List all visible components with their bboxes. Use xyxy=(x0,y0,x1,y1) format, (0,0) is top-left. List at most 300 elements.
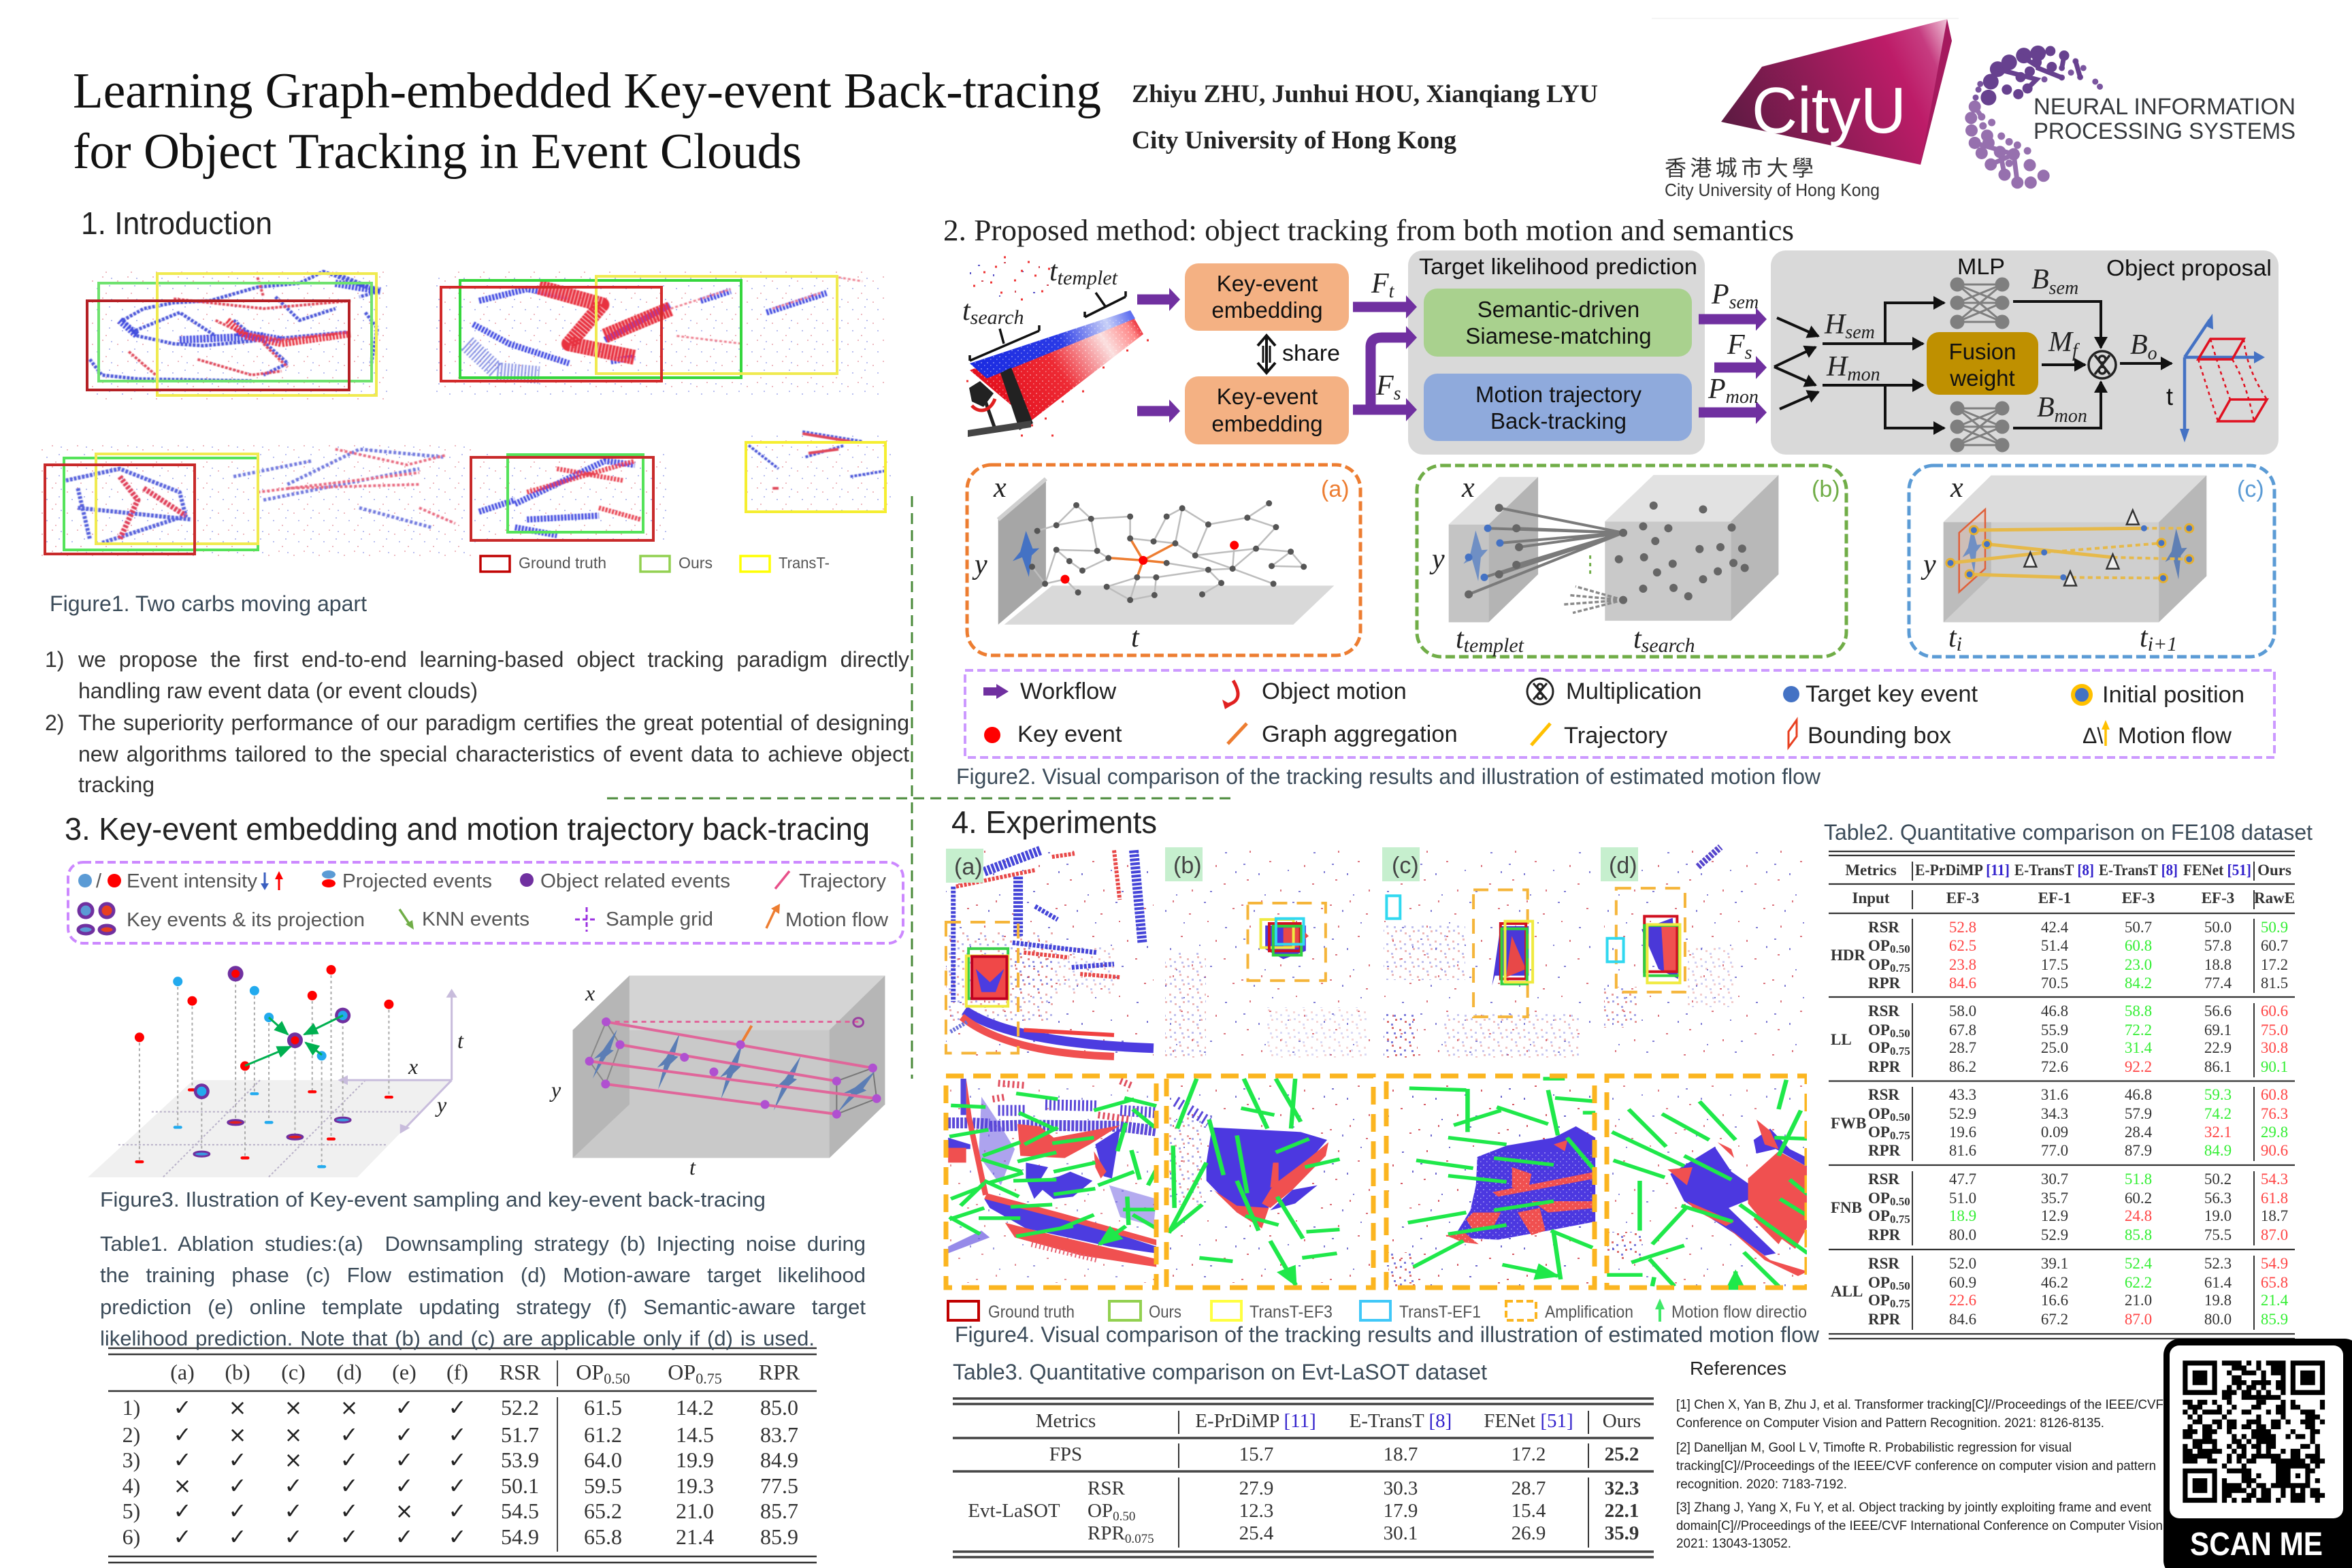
object proposal axes and box: t xyxy=(2166,382,2173,410)
figure 4 legend xyxy=(948,1298,1807,1322)
figure 1 legend: Ours xyxy=(679,554,713,572)
table 1 description xyxy=(100,1232,866,1350)
table 1: ablation studies: 54.5 xyxy=(501,1499,539,1523)
table 3: Evt-LaSOT comparison: 26.9 xyxy=(1512,1522,1546,1544)
label: t templet and t search: templet xyxy=(1058,267,1118,289)
table 2: FE108 comparison: 39.1 xyxy=(2041,1255,2068,1272)
figure 1 legend: Ground truth xyxy=(519,554,606,572)
object motion item xyxy=(1222,679,1407,709)
figure 3 left: key-event sampling: y xyxy=(435,1092,447,1117)
table 2: FE108 comparison: 81.6 xyxy=(1949,1142,1976,1159)
event intensity item xyxy=(78,870,283,892)
table 1: ablation studies: 61.2 xyxy=(584,1422,622,1447)
heading: 4. Experiments: 4. Experiments xyxy=(951,804,1157,840)
table 2: FE108 comparison: 46.2 xyxy=(2041,1274,2068,1291)
object proposal axes and box xyxy=(2166,314,2267,442)
table 1: ablation studies: 21.0 xyxy=(676,1499,714,1523)
table 1: ablation studies: ✓ xyxy=(174,1524,191,1550)
table 1: ablation studies: 1) xyxy=(122,1395,140,1420)
table 2: FE108 comparison: 0.75 xyxy=(1890,1297,1910,1310)
figure 4 legend: Ours xyxy=(1149,1303,1181,1322)
table 2: FE108 comparison: 30.8 xyxy=(2261,1039,2288,1056)
table 2: FE108 comparison: 75.0 xyxy=(2261,1022,2288,1039)
table 1: ablation studies: (a) xyxy=(170,1360,195,1384)
key events and projection item xyxy=(78,904,365,934)
table 2: FE108 comparison: EF-1 xyxy=(2038,889,2071,906)
figure 1: event clouds with tracking boxes xyxy=(41,269,892,558)
table 2: FE108 comparison: 52.4 xyxy=(2125,1255,2153,1272)
logo: NeurIPS: NEURAL INFORMATION xyxy=(2034,94,2296,120)
table 1: ablation studies: 0.50 xyxy=(604,1370,630,1387)
projected events item: Projected events xyxy=(342,870,492,892)
panel: object proposal xyxy=(1771,250,2278,455)
table 2: FE108 comparison: 23.0 xyxy=(2125,956,2152,973)
table 2: FE108 comparison: OP xyxy=(1868,1022,1890,1039)
table 2: FE108 comparison: 0.50 xyxy=(1890,1195,1910,1208)
table 3: Evt-LaSOT comparison: 0.075 xyxy=(1125,1532,1154,1546)
table 2: FE108 comparison: 30.7 xyxy=(2041,1171,2068,1188)
references xyxy=(1676,1358,2166,1551)
motion flow item: Motion flow xyxy=(2118,723,2232,748)
table 2: FE108 comparison: 0.50 xyxy=(1890,1111,1910,1124)
panel (b): semantic matching xyxy=(1417,466,1846,657)
table 1: ablation studies: ✓ xyxy=(174,1422,191,1448)
figure 3 right: key-event back-tracing: t xyxy=(689,1155,696,1179)
table 3: Evt-LaSOT comparison: RSR xyxy=(1088,1477,1125,1499)
label: t templet and t search: search xyxy=(970,306,1024,329)
share arrow: share xyxy=(1282,340,1340,365)
logo: CityU: CityU xyxy=(1752,74,1906,147)
figure 4 caption: Figure4. Visual comparison of the tracking results and illustration of estimated motion flow xyxy=(955,1322,1820,1347)
table 1: ablation studies: ✓ xyxy=(284,1473,302,1499)
references: tracking[C]//Proceedings of the IEEE/CVF conference on computer vision and pattern xyxy=(1676,1458,2156,1473)
table 1: ablation studies: ✓ xyxy=(340,1422,358,1448)
motion flow item xyxy=(766,904,889,931)
table 3: Evt-LaSOT comparison: 15.7 xyxy=(1239,1443,1273,1465)
table 2: FE108 comparison: FENet [51] xyxy=(2183,862,2251,879)
figure 4 legend: Ground truth xyxy=(988,1303,1075,1322)
table 1: ablation studies: ✓ xyxy=(395,1422,413,1448)
table 2: FE108 comparison: 87.0 xyxy=(2261,1226,2288,1243)
table 2: FE108 comparison: 52.9 xyxy=(1949,1105,1976,1122)
black arrows xyxy=(1774,301,2172,428)
table 2: FE108 comparison: 61.8 xyxy=(2261,1190,2288,1207)
key-event embedding lower: Key-event xyxy=(1217,384,1318,409)
title: for Object Tracking in Event Clouds xyxy=(73,124,802,180)
motion trajectory box: Motion trajectory xyxy=(1475,382,1642,407)
table 1: ablation studies: ✓ xyxy=(448,1524,466,1550)
table 2: FE108 comparison: 19.8 xyxy=(2204,1292,2232,1309)
table 2: FE108 comparison: RSR xyxy=(1868,1086,1899,1103)
panel (a): graph aggregation: y xyxy=(972,549,987,581)
table 2: FE108 comparison: 61.4 xyxy=(2204,1274,2232,1291)
table 1: ablation studies: 77.5 xyxy=(760,1473,798,1498)
key-event embedding lower: embedding xyxy=(1211,411,1323,436)
introduction text block xyxy=(45,647,909,797)
table 2: FE108 comparison: 86.2 xyxy=(1949,1058,1976,1075)
object motion item: Object motion xyxy=(1262,679,1407,704)
motion flow item: Δ\ xyxy=(2082,723,2103,748)
table 2: FE108 comparison: 54.3 xyxy=(2261,1171,2288,1188)
table 1: ablation studies: (e) xyxy=(392,1360,416,1384)
table 3: Evt-LaSOT comparison: 18.7 xyxy=(1384,1443,1418,1465)
figure 3 legend xyxy=(68,862,903,943)
table 2: FE108 comparison: 34.3 xyxy=(2041,1105,2068,1122)
references: [1] Chen X, Yan B, Zhu J, et al. Transformer tracking[C]//Proceedings of the IEEE/CVF xyxy=(1676,1397,2163,1412)
trajectory item: Trajectory xyxy=(1564,723,1668,749)
table 2: FE108 comparison: RPR xyxy=(1868,1311,1901,1328)
table 1: ablation studies: 61.5 xyxy=(584,1395,622,1420)
initial position item: Initial position xyxy=(2102,682,2244,708)
title: Learning Graph-embedded Key-event Back-tracing xyxy=(73,63,1101,119)
table 1: ablation studies: OP xyxy=(668,1360,696,1384)
table 1: ablation studies: 2) xyxy=(122,1422,140,1447)
table 2: FE108 comparison xyxy=(1829,851,2295,1339)
references: 2021: 13043-13052. xyxy=(1676,1536,1791,1551)
table 1: ablation studies: 84.9 xyxy=(760,1448,798,1472)
table 1: ablation studies: ✓ xyxy=(340,1524,358,1550)
table 1: ablation studies: 65.2 xyxy=(584,1499,622,1523)
table 1: ablation studies: ✓ xyxy=(340,1498,358,1524)
figure 3 caption: Figure3. Ilustration of Key-event sampling and key-event back-tracing xyxy=(100,1188,766,1211)
table 2: FE108 comparison: 50.9 xyxy=(2261,919,2288,936)
table 2: FE108 comparison: Metrics xyxy=(1845,862,1897,879)
figure 4 panel labels: (b) xyxy=(1173,853,1202,879)
table 3: Evt-LaSOT comparison: Ours xyxy=(1603,1410,1641,1432)
table 2: FE108 comparison: 0.75 xyxy=(1890,1213,1910,1226)
table 1: ablation studies: ✓ xyxy=(174,1447,191,1473)
table 1: ablation studies: ✓ xyxy=(448,1473,466,1499)
panel (a): graph aggregation: t xyxy=(1131,622,1140,653)
table 2: FE108 comparison: E-TransT [8] xyxy=(2099,862,2178,879)
table 1: ablation studies: ✓ xyxy=(174,1394,191,1420)
table 2: FE108 comparison: 77.0 xyxy=(2041,1142,2068,1159)
math labels: sem xyxy=(1729,292,1759,313)
table 2: FE108 comparison: 19.0 xyxy=(2204,1207,2232,1224)
table 1: ablation studies: ✓ xyxy=(448,1447,466,1473)
math labels: F xyxy=(1371,268,1389,299)
table 2: FE108 comparison: 21.0 xyxy=(2125,1292,2152,1309)
table 2: FE108 comparison: Input xyxy=(1852,889,1890,906)
logo: NeurIPS: PROCESSING SYSTEMS xyxy=(2034,118,2296,144)
table 2: FE108 comparison: 32.1 xyxy=(2204,1124,2232,1141)
table 2: FE108 comparison: RSR xyxy=(1868,1002,1899,1019)
panel (a): graph aggregation xyxy=(967,465,1360,655)
table 2: FE108 comparison: 69.1 xyxy=(2204,1022,2232,1039)
table 2: FE108 comparison: 59.3 xyxy=(2204,1086,2232,1103)
figure 4 panel labels: (c) xyxy=(1392,853,1419,879)
table 2: FE108 comparison: 60.9 xyxy=(1949,1274,1976,1291)
label: t templet and t search: t xyxy=(962,295,970,327)
MLP networks xyxy=(1951,278,2008,451)
table 2: FE108 comparison: FNB xyxy=(1831,1199,1862,1216)
table 2: FE108 comparison: 58.0 xyxy=(1949,1002,1976,1019)
table 2: FE108 comparison: 85.8 xyxy=(2125,1226,2152,1243)
table 2: FE108 comparison: RPR xyxy=(1868,1226,1901,1243)
table 2: FE108 comparison: 50.7 xyxy=(2125,919,2152,936)
figure 3 left: key-event sampling xyxy=(88,970,464,1177)
logo: CityU xyxy=(1652,18,1959,200)
panel (c): trajectory back-tracking: x xyxy=(1950,472,1963,504)
table 2: FE108 comparison: RSR xyxy=(1868,1171,1899,1188)
table 2: FE108 comparison: 74.2 xyxy=(2204,1105,2232,1122)
panel (b): semantic matching: y xyxy=(1429,544,1445,575)
trajectory item: Trajectory xyxy=(799,870,886,892)
table 2: FE108 comparison: 90.1 xyxy=(2261,1058,2288,1075)
table 2: FE108 comparison: OP xyxy=(1868,1190,1890,1207)
table 1: ablation studies: 19.9 xyxy=(676,1448,714,1472)
table 1 description: Table1. Ablation studies:(a) Downsampling strategy (b) Injecting noise during xyxy=(100,1232,866,1256)
event cloud input xyxy=(965,255,1149,437)
figure 4 overview frames xyxy=(946,847,1808,1058)
figure 4 amplified frames xyxy=(946,1068,1820,1293)
table 1: ablation studies xyxy=(108,1348,817,1563)
table 1: ablation studies: ✓ xyxy=(284,1498,302,1524)
table 2: FE108 comparison: 0.75 xyxy=(1890,1129,1910,1142)
table 1: ablation studies: ✓ xyxy=(229,1498,246,1524)
table 2: FE108 comparison: RPR xyxy=(1868,1142,1901,1159)
table 2: FE108 comparison: 42.4 xyxy=(2041,919,2069,936)
table 1: ablation studies: 50.1 xyxy=(501,1473,539,1498)
figure 2 legend xyxy=(965,670,2274,757)
math labels: H xyxy=(1825,309,1845,340)
table 1: ablation studies: OP xyxy=(576,1360,604,1384)
table 3: Evt-LaSOT comparison: 17.2 xyxy=(1512,1443,1546,1465)
figure 2 caption: Figure2. Visual comparison of the tracking results and illustration of estimated motion flow xyxy=(956,764,1821,789)
table 2: FE108 comparison: 72.2 xyxy=(2125,1022,2152,1039)
table 1: ablation studies: × xyxy=(284,1447,302,1473)
math labels: sem xyxy=(1845,322,1875,343)
table 2: FE108 comparison: RPR xyxy=(1868,1058,1901,1075)
table 1: ablation studies: 83.7 xyxy=(760,1422,798,1447)
table 3: Evt-LaSOT comparison: 32.3 xyxy=(1605,1477,1639,1499)
table 2: FE108 comparison: 75.5 xyxy=(2204,1226,2232,1243)
semantic-driven box: Siamese-matching xyxy=(1465,323,1652,348)
table 2: FE108 comparison: 67.8 xyxy=(1949,1022,1976,1039)
introduction text block: The superiority performance of our paradigm certifies the great potential of designing xyxy=(78,710,909,735)
table 2: FE108 comparison: 52.9 xyxy=(2041,1226,2068,1243)
table 2: FE108 comparison: 35.7 xyxy=(2041,1190,2068,1207)
table 1: ablation studies: 21.4 xyxy=(676,1524,714,1549)
panel (a): graph aggregation: x xyxy=(993,472,1007,504)
table 1: ablation studies: ✓ xyxy=(340,1473,358,1499)
table 2: FE108 comparison: 18.9 xyxy=(1949,1207,1976,1224)
table 2: FE108 comparison: 85.9 xyxy=(2261,1311,2288,1328)
math labels: o xyxy=(2148,343,2157,364)
figure 3 right: key-event back-tracing xyxy=(549,976,885,1179)
math labels: B xyxy=(2037,392,2055,423)
table 1: ablation studies: ✓ xyxy=(395,1473,413,1499)
table 1: ablation studies: (f) xyxy=(446,1360,468,1384)
table 1: ablation studies: × xyxy=(229,1422,246,1448)
table 3: Evt-LaSOT comparison: 30.1 xyxy=(1384,1522,1418,1544)
table 1: ablation studies: × xyxy=(395,1498,413,1524)
table 2: FE108 comparison: 57.9 xyxy=(2125,1105,2152,1122)
table 2: FE108 comparison: 0.09 xyxy=(2041,1124,2068,1141)
math labels: H xyxy=(1827,351,1847,382)
amplified (a) xyxy=(948,1079,1156,1267)
table 3: Evt-LaSOT comparison: Evt-LaSOT xyxy=(968,1500,1060,1522)
table 1: ablation studies: ✓ xyxy=(174,1498,191,1524)
motion trajectory box xyxy=(1424,374,1692,441)
figure 4 panel labels: (d) xyxy=(1609,853,1637,879)
table 2: FE108 comparison: 23.8 xyxy=(1949,956,1976,973)
icon: multiplication xyxy=(2089,351,2116,378)
table 2: FE108 comparison: 80.0 xyxy=(2204,1311,2232,1328)
table 1: ablation studies: ✓ xyxy=(340,1447,358,1473)
table 1: ablation studies: (d) xyxy=(336,1360,362,1384)
table 2: FE108 comparison: HDR xyxy=(1831,947,1866,964)
introduction text block: new algorithms tailored to the special characteristics of event data to achieve object xyxy=(78,742,909,766)
table 2: FE108 comparison: FWB xyxy=(1831,1115,1866,1132)
panel (a): graph aggregation: (a) xyxy=(1321,476,1350,502)
table 1: ablation studies: 85.9 xyxy=(760,1524,798,1549)
table 2: FE108 comparison: OP xyxy=(1868,937,1890,954)
table 2: FE108 comparison: 28.4 xyxy=(2125,1124,2153,1141)
motion trajectory box: Back-tracking xyxy=(1490,408,1627,434)
table 1: ablation studies: 5) xyxy=(122,1499,140,1523)
table 1: ablation studies: ✓ xyxy=(229,1524,246,1550)
math labels: B xyxy=(2130,329,2148,361)
table 3: Evt-LaSOT comparison: 35.9 xyxy=(1605,1522,1639,1544)
table 2: FE108 comparison: 18.7 xyxy=(2261,1207,2288,1224)
fusion weight box xyxy=(1927,332,2038,395)
heading: 1. Introduction: 1. Introduction xyxy=(81,206,272,241)
table 2: FE108 comparison: 87.9 xyxy=(2125,1142,2152,1159)
table 2: FE108 comparison: 60.7 xyxy=(2261,937,2288,954)
panel (b): semantic matching: x xyxy=(1461,472,1475,504)
KNN events item: KNN events xyxy=(422,909,529,930)
figure 3 right: key-event back-tracing: x xyxy=(585,981,595,1005)
table 2: FE108 comparison: 51.0 xyxy=(1949,1190,1976,1207)
table 2: FE108 comparison: 57.8 xyxy=(2204,937,2232,954)
table 1: ablation studies: 64.0 xyxy=(584,1448,622,1472)
table 1: ablation studies: ✓ xyxy=(448,1498,466,1524)
table 3: Evt-LaSOT comparison: 25.4 xyxy=(1239,1522,1274,1544)
references: domain[C]//Proceedings of the IEEE/CVF International Conference on Computer Vision. xyxy=(1676,1518,2166,1533)
table 2: FE108 comparison: 60.2 xyxy=(2125,1190,2152,1207)
panel (b): semantic matching: templet xyxy=(1464,634,1524,657)
table 2: FE108 comparison: 22.6 xyxy=(1949,1292,1976,1309)
table 2: FE108 comparison: 62.2 xyxy=(2125,1274,2152,1291)
key-event embedding lower xyxy=(1185,376,1349,444)
table 1: ablation studies: 54.9 xyxy=(501,1524,539,1549)
authors and affiliation xyxy=(1132,80,1598,154)
QR modules xyxy=(2183,1363,2325,1500)
table 1: ablation studies: RPR xyxy=(759,1360,800,1384)
table 2: FE108 comparison: 80.0 xyxy=(1949,1226,1976,1243)
panel (b): semantic matching: search xyxy=(1642,634,1695,657)
table 2: FE108 comparison: 18.8 xyxy=(2204,956,2232,973)
table 1 description: prediction (e) online template updating strategy (f) Semantic-aware target xyxy=(100,1295,866,1319)
table 3: Evt-LaSOT comparison: 30.3 xyxy=(1384,1477,1418,1499)
table 2: FE108 comparison: 84.2 xyxy=(2125,975,2152,992)
table 2: FE108 comparison: 60.6 xyxy=(2261,1002,2288,1019)
bounding box item: Bounding box xyxy=(1808,723,1951,749)
table 2: FE108 comparison: Ours xyxy=(2257,862,2291,879)
key events and projection item: Key events & its projection xyxy=(127,909,365,931)
table 3: Evt-LaSOT comparison: 0.50 xyxy=(1113,1509,1135,1524)
semantic-driven box: Semantic-driven xyxy=(1477,297,1639,322)
math labels: t xyxy=(1389,281,1395,302)
table 2: FE108 comparison: 46.8 xyxy=(2041,1002,2068,1019)
table 2: FE108 comparison: 84.6 xyxy=(1949,975,1976,992)
title xyxy=(73,63,1101,180)
introduction text block: we propose the first end-to-end learning-based object tracking paradigm directly xyxy=(78,647,909,672)
table 2: FE108 comparison: 31.4 xyxy=(2125,1039,2153,1056)
table 3 caption: Table3. Quantitative comparison on Evt-LaSOT dataset xyxy=(953,1360,1487,1384)
event intensity item: Event intensity xyxy=(127,870,257,892)
heading: 2. Proposed method: 2. Proposed method: object tracking from both motion and semantics xyxy=(943,214,1794,247)
table 2: FE108 comparison: RSR xyxy=(1868,1255,1899,1272)
figure 1 legend xyxy=(480,554,830,572)
table 2: FE108 comparison: 17.2 xyxy=(2261,956,2288,973)
amplified (d) xyxy=(1667,1120,1808,1276)
table 1: ablation studies: × xyxy=(284,1394,302,1420)
table 3: Evt-LaSOT comparison: 17.9 xyxy=(1384,1500,1418,1522)
table 2: FE108 comparison: 0.50 xyxy=(1890,943,1910,956)
figure 4 legend: Motion flow directio xyxy=(1671,1303,1807,1322)
table 1: ablation studies: × xyxy=(229,1394,246,1420)
references: References xyxy=(1690,1358,1786,1379)
table 1: ablation studies: 4) xyxy=(122,1473,140,1498)
logo: CityU: City University of Hong Kong xyxy=(1665,180,1880,200)
table 2: FE108 comparison: OP xyxy=(1868,1039,1890,1056)
panel (c): trajectory back-tracking: (c) xyxy=(2237,476,2264,502)
panel (b): semantic matching: t xyxy=(1456,623,1464,655)
table 1: ablation studies: 14.2 xyxy=(676,1395,714,1420)
figure 3 left: key-event sampling: t xyxy=(457,1028,464,1053)
panel (c): trajectory back-tracking: t xyxy=(1948,622,1957,653)
table 2: FE108 comparison: E-TransT [8] xyxy=(2014,862,2094,879)
figure 4 legend: Amplification xyxy=(1545,1303,1633,1322)
table 2 caption: Table2. Quantitative comparison on FE108 dataset xyxy=(1824,820,2313,845)
table 1: ablation studies: 19.3 xyxy=(676,1473,714,1498)
table 1: ablation studies: 0.75 xyxy=(696,1370,722,1387)
math labels: F xyxy=(1376,370,1394,402)
table 2: FE108 comparison: 17.5 xyxy=(2041,956,2068,973)
key-event embedding upper: Key-event xyxy=(1217,271,1318,296)
math labels: P xyxy=(1712,279,1729,310)
table 3: Evt-LaSOT comparison: 12.3 xyxy=(1239,1500,1273,1522)
heading: 3. Key-event embedding: 3. Key-event embedding and motion trajectory back-tracing xyxy=(65,811,870,847)
table 2: FE108 comparison: EF-3 xyxy=(2202,889,2234,906)
table 2: FE108 comparison: 60.8 xyxy=(2125,937,2152,954)
figure 3 right: key-event back-tracing: y xyxy=(549,1077,561,1102)
sample grid item xyxy=(575,907,713,932)
logo: NeurIPS xyxy=(1971,51,2296,182)
table 2: FE108 comparison: RSR xyxy=(1868,919,1899,936)
table 1: ablation studies: 52.2 xyxy=(501,1395,539,1420)
table 2: FE108 comparison: 60.8 xyxy=(2261,1086,2288,1103)
table 1: ablation studies: 85.0 xyxy=(760,1395,798,1420)
table 2: FE108 comparison: 51.8 xyxy=(2125,1171,2152,1188)
share arrow xyxy=(1258,336,1340,373)
table 2: FE108 comparison: 21.4 xyxy=(2261,1292,2289,1309)
introduction text block: 1) xyxy=(45,647,64,672)
authors and affiliation: Zhiyu ZHU, Junhui HOU, Xianqiang LYU xyxy=(1132,80,1598,108)
panel (c): trajectory back-tracking: y xyxy=(1921,549,1936,581)
math labels: F xyxy=(1727,329,1745,361)
table 2: FE108 comparison: 90.6 xyxy=(2261,1142,2288,1159)
table 2: FE108 comparison: 52.0 xyxy=(1949,1255,1976,1272)
table 3: Evt-LaSOT comparison: 28.7 xyxy=(1512,1477,1546,1499)
table 3: Evt-LaSOT comparison: RPR xyxy=(1088,1522,1125,1544)
references: [2] Danelljan M, Gool L V, Timofte R. Probabilistic regression for visual xyxy=(1676,1440,2072,1455)
table 2: FE108 comparison: 81.5 xyxy=(2261,975,2288,992)
table 2: FE108 comparison: 25.0 xyxy=(2041,1039,2068,1056)
object related events item: Object related events xyxy=(540,870,730,892)
